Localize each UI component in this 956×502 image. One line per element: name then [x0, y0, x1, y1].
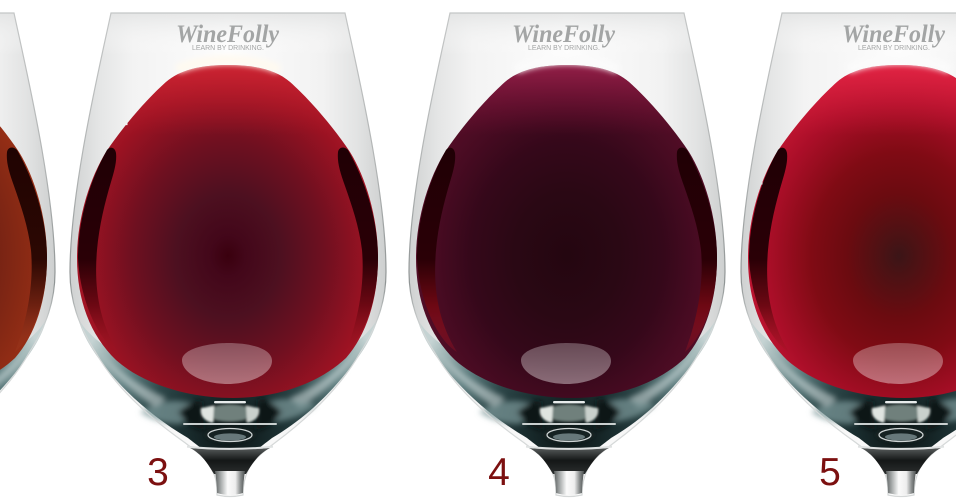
wine body, brown-red: [0, 65, 47, 398]
top fade: [851, 60, 947, 68]
dark wine band: [7, 148, 47, 352]
logo: glass 5: LEARN BY DRINKING.: [858, 43, 930, 52]
meniscus highlight: [521, 343, 611, 384]
wine body, dark purple: [416, 65, 717, 398]
dark wine bands: [417, 148, 717, 352]
number 5: 5: [819, 451, 841, 494]
panel: glass 2, partly cropped at left edge: [0, 13, 55, 496]
top shading: [416, 65, 717, 398]
logo: glass 3: LEARN BY DRINKING.: [192, 43, 264, 52]
logo: glass 4: LEARN BY DRINKING.: [528, 43, 600, 52]
dark wine band: [749, 148, 789, 352]
wine body, bright crimson: [748, 65, 956, 398]
logo: glass 5: WineFolly: [842, 21, 946, 48]
wine body, ruby red: [77, 65, 378, 398]
meniscus highlight: [853, 343, 943, 384]
panel: glass 3: [70, 13, 386, 496]
top shading: [748, 65, 956, 398]
number 4: 4: [488, 451, 510, 494]
logo: glass 3: WineFolly: [176, 21, 280, 48]
logo: glass 4: WineFolly: [512, 21, 616, 48]
number 3: 3: [147, 451, 169, 494]
top shading: [77, 65, 378, 398]
dark wine bands: [78, 148, 378, 352]
panel: glass 4: [409, 13, 725, 496]
meniscus highlight: [182, 343, 272, 384]
panel: glass 5, partly cropped at right edge: [741, 13, 956, 496]
top fade: [519, 60, 615, 68]
top glow: [180, 60, 276, 68]
